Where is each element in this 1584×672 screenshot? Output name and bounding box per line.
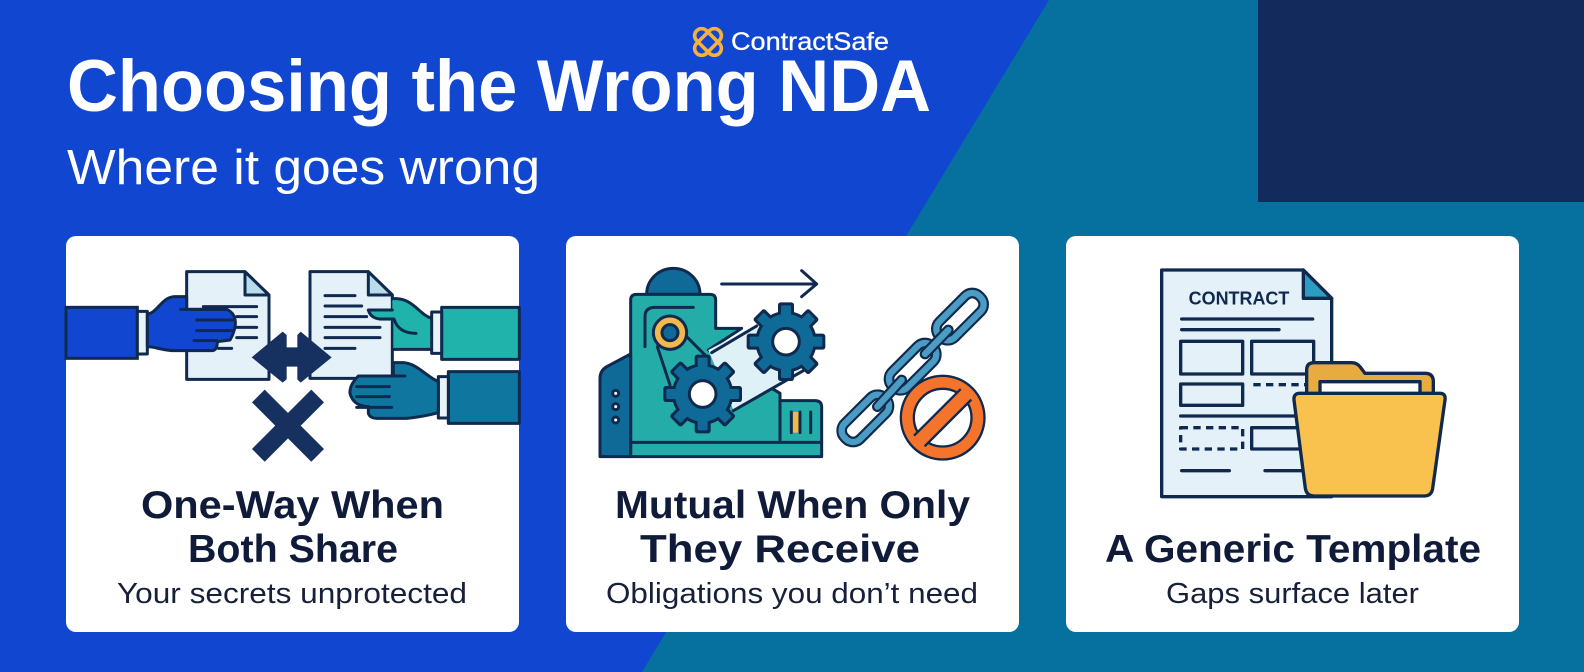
heading: A Generic Template xyxy=(1105,528,1481,571)
heading: One-Way When xyxy=(141,484,444,527)
icon: contract document and folder xyxy=(1162,270,1445,497)
subtext: Your secrets unprotected xyxy=(117,578,467,610)
icon: contract document and folder: CONTRACT xyxy=(1189,287,1290,308)
heading line 2: Both Share xyxy=(188,528,398,571)
icon: logo knot xyxy=(692,26,724,58)
logo wordmark: ContractSafe xyxy=(731,28,889,56)
subtext: Gaps surface later xyxy=(1166,578,1419,610)
panel: mutual NDA xyxy=(566,236,1019,632)
navy corner block xyxy=(1258,0,1584,202)
panel: one-way NDA xyxy=(66,236,519,632)
heading: Mutual When Only xyxy=(615,484,970,527)
subtext: Obligations you don’t need xyxy=(606,578,978,610)
title: Choosing the Wrong NDA xyxy=(67,46,931,127)
panel: generic template xyxy=(1066,236,1519,632)
icon: hands exchanging documents with crossed-out arrow xyxy=(66,272,519,455)
logo: ContractSafe xyxy=(692,26,889,58)
subtitle: Where it goes wrong xyxy=(67,141,540,195)
icon: machine with gears, arrow, broken chain xyxy=(600,268,988,457)
background: teal diagonal panel xyxy=(642,0,1584,672)
heading line 2: They Receive xyxy=(640,528,920,571)
